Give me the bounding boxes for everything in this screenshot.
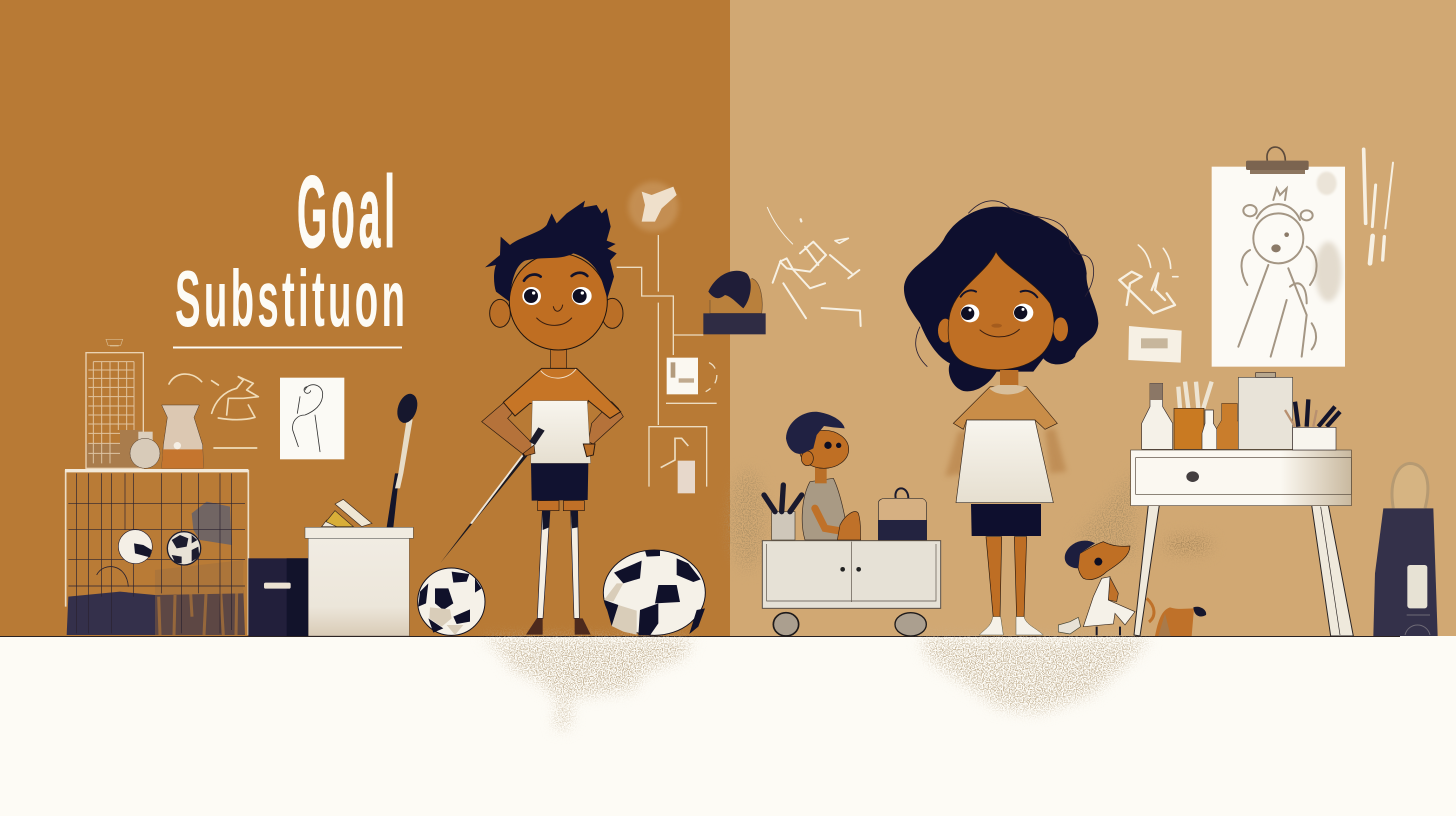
small white ball (118, 530, 152, 564)
title line: Goal: Goal (297, 156, 395, 269)
woman skirt (971, 504, 1041, 536)
left furniture group (65, 339, 421, 636)
child arm (815, 508, 838, 531)
background: right tan panel (730, 0, 1456, 637)
tall wire grid (86, 339, 143, 468)
boy with soccer balls group (418, 182, 766, 635)
pet head (1078, 542, 1130, 580)
desk legs (1134, 505, 1353, 636)
child (786, 412, 861, 540)
woman face features (961, 290, 1037, 337)
woman arms blur (945, 428, 1067, 477)
small note icon (667, 358, 717, 394)
title underline (173, 346, 402, 348)
pet body (1083, 577, 1135, 627)
woman shirt (953, 385, 1057, 503)
chalk rocking horse sketch (169, 374, 258, 448)
chalk marks (1364, 149, 1393, 263)
woman shoes (979, 617, 1043, 635)
paper with figure sketch (280, 378, 344, 459)
boxed hook icon (661, 438, 695, 493)
child head (799, 430, 849, 468)
desk body with drawer (1131, 450, 1351, 506)
orange bottle (1217, 403, 1241, 449)
dark tote bag (1373, 463, 1438, 636)
cream canister (1238, 373, 1293, 449)
rolling cart (762, 541, 941, 636)
right-hand desk and poster group (1119, 147, 1438, 636)
child body (802, 478, 860, 540)
dark navy box (248, 558, 308, 636)
woman, child and cart group (762, 201, 1098, 636)
boy hair (485, 201, 617, 302)
small round bottle (130, 432, 160, 468)
small white bottle (1202, 410, 1219, 449)
woman ears (938, 317, 1068, 343)
small fox-like pet (1058, 541, 1206, 636)
boy arms (482, 402, 623, 456)
boy ears (490, 298, 623, 328)
small patterned ball (167, 532, 201, 565)
boy thighs and legs (526, 501, 591, 635)
wire ball cabinet (65, 471, 248, 636)
books on box (322, 499, 372, 527)
floor stain left (482, 638, 693, 728)
child hair (786, 412, 845, 454)
bottle tall (1142, 383, 1173, 449)
boy shirt (503, 368, 621, 463)
pet legs and scrap (1097, 627, 1120, 635)
wall shadows (730, 470, 1212, 570)
title (173, 156, 405, 348)
chalk sketch (1119, 245, 1178, 313)
woman neck (1000, 370, 1018, 393)
poster clip (1246, 147, 1309, 174)
white box with lid (305, 527, 413, 636)
background: cream floor (0, 636, 1456, 816)
small note (1128, 326, 1182, 363)
boy hands (583, 444, 595, 457)
stick (441, 427, 545, 563)
chalk smudge icon (628, 182, 678, 232)
chalk rocking chair sketch (767, 207, 861, 326)
small soccer ball (418, 568, 485, 635)
flask with orange liquid (162, 405, 203, 468)
woman legs (986, 537, 1027, 618)
wall circuit diagram (617, 182, 717, 493)
loose hair strands (916, 201, 1094, 367)
floor stain right (920, 638, 1150, 712)
child knee (837, 512, 861, 540)
orange pencil cup (1174, 382, 1212, 449)
child neck (815, 465, 827, 483)
woman face (948, 252, 1054, 370)
bell icon on shelf (703, 271, 766, 334)
small bag (878, 488, 927, 540)
boy neck (551, 349, 567, 371)
background: left ochre panel (0, 0, 730, 637)
pencil cup (764, 485, 802, 540)
large soccer ball (603, 550, 705, 635)
boy face features (522, 273, 592, 325)
boy head (509, 253, 607, 350)
woman back hair (904, 207, 1098, 391)
pet hair (1065, 541, 1095, 568)
poster with sketch (1212, 167, 1345, 367)
white pencil cup (1285, 399, 1340, 450)
title line: Substituon: Substituon (175, 255, 405, 344)
pet eye (1094, 558, 1102, 566)
pet rear and tail (1147, 598, 1206, 636)
brush (387, 391, 421, 527)
boy shorts (531, 463, 588, 501)
